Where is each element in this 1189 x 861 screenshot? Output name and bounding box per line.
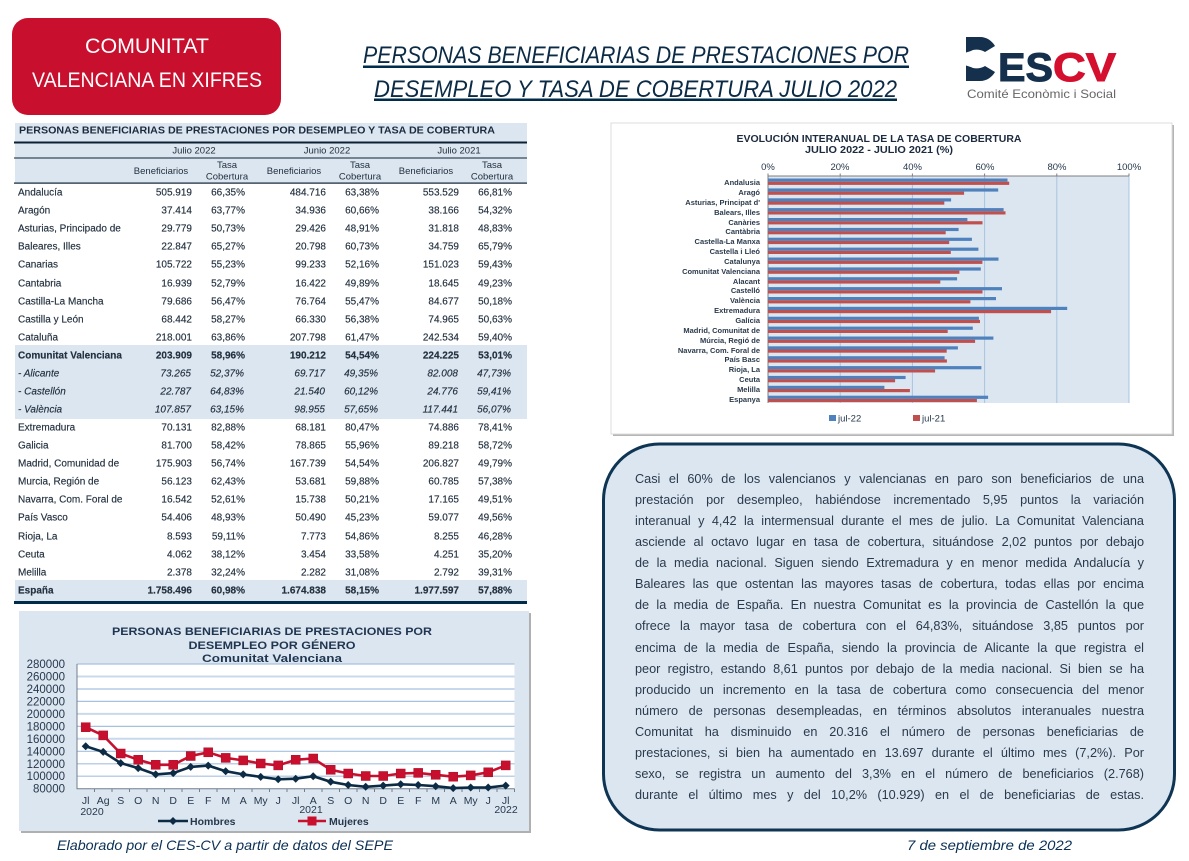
table rows: autonomous communities: 2.282 — [301, 568, 326, 578]
y axis labels: 100000 — [27, 771, 65, 783]
table rows: autonomous communities: 34.759 — [428, 242, 459, 252]
table rows: autonomous communities: 151.023 — [423, 260, 459, 270]
category labels: Espanya — [729, 395, 761, 404]
y axis labels: 120000 — [27, 759, 65, 771]
table rows: autonomous communities: 58,42% — [211, 440, 245, 452]
table rows: autonomous communities: 74.965 — [428, 314, 459, 326]
table rows: autonomous communities: 190.212 — [290, 350, 326, 362]
table rows: autonomous communities: 54,54% — [345, 458, 379, 470]
y axis labels: 80000 — [33, 784, 65, 796]
table rows: autonomous communities: 1.674.838 — [282, 586, 326, 596]
table rows: autonomous communities: 18.645 — [428, 278, 459, 290]
category labels: Comunitat Valenciana — [682, 267, 761, 276]
x axis labels: M — [431, 795, 440, 807]
table rows: autonomous communities: 105.722 — [156, 260, 192, 270]
table header: Cobertura — [471, 172, 514, 182]
source note: Elaborado por el CES-CV a partir de datos del SEPE — [57, 837, 394, 853]
x axis labels: J — [276, 795, 281, 807]
table rows: autonomous communities: 60.785 — [428, 476, 459, 488]
table rows: autonomous communities: Galicia — [18, 440, 49, 452]
table rows: autonomous communities: 60,12% — [344, 386, 378, 398]
x axis labels: S — [117, 795, 124, 807]
bars: jul-22 — [768, 178, 1067, 399]
x axis labels: M — [221, 795, 230, 807]
table rows: autonomous communities: 49,35% — [344, 368, 378, 380]
table rows: autonomous communities: 38.166 — [428, 206, 459, 216]
bar chart legend: jul-21 — [921, 414, 945, 424]
table rows: autonomous communities: 59,40% — [478, 332, 512, 344]
main title: DESEMPLEO Y TASA DE COBERTURA JULIO 2022 — [374, 76, 897, 103]
table rows: autonomous communities: Melilla — [18, 568, 47, 578]
table rows: autonomous communities: - Castellón — [18, 386, 66, 398]
table rows: autonomous communities: 54,54% — [345, 350, 379, 362]
table rows: autonomous communities: 60,73% — [345, 242, 379, 252]
table rows: autonomous communities: Ceuta — [18, 550, 45, 560]
table rows: autonomous communities: 21.540 — [293, 386, 325, 398]
table rows: autonomous communities: 66,35% — [211, 188, 245, 198]
bar chart: coverage rate — [611, 123, 1174, 436]
table rows: autonomous communities: 31,08% — [345, 568, 379, 578]
table rows: autonomous communities: 98.955 — [294, 404, 325, 416]
percentage axis: 100% — [1117, 162, 1142, 173]
table rows: autonomous communities: 16.422 — [295, 278, 326, 290]
table rows: autonomous communities: 2.792 — [434, 568, 459, 578]
table rows: autonomous communities: 50,18% — [478, 296, 512, 308]
table header — [134, 146, 514, 182]
table rows: autonomous communities: 56,38% — [345, 314, 379, 326]
table rows: autonomous communities: 54,32% — [478, 206, 512, 216]
table rows: autonomous communities: 54,86% — [345, 532, 379, 542]
table rows: autonomous communities: 52,37% — [210, 368, 244, 380]
category labels — [678, 178, 761, 404]
table rows: autonomous communities: 29.426 — [295, 224, 326, 234]
x axis labels: O — [134, 795, 142, 807]
table rows: autonomous communities: 55,96% — [345, 440, 379, 452]
table rows: autonomous communities: 63,86% — [211, 332, 245, 344]
table rows: autonomous communities: Madrid, Comunidad de — [18, 458, 120, 470]
x axis labels: My — [464, 795, 478, 807]
category labels: Melilla — [737, 385, 761, 394]
table rows: autonomous communities: 33,58% — [345, 550, 379, 560]
category labels: Canàries — [728, 218, 760, 227]
table rows: autonomous communities: - València — [18, 404, 63, 416]
y axis labels: 280000 — [27, 659, 65, 671]
table rows: autonomous communities: 38,12% — [211, 550, 245, 560]
table rows: autonomous communities: Navarra, Com. Foral de — [18, 494, 123, 506]
logo: CES CV — [966, 37, 1116, 101]
x axis labels: Jl — [82, 795, 89, 807]
line chart title: Comunitat Valenciana — [202, 653, 343, 665]
commentary text: peor registro, estando 8,61 puntos por debajo de la media nacional. Si bien se ha — [635, 662, 1144, 676]
category labels: Galícia — [735, 316, 761, 325]
category labels: Alacant — [733, 277, 761, 286]
table rows: autonomous communities: 2.378 — [167, 568, 192, 578]
table rows: autonomous communities: 81.700 — [161, 440, 192, 452]
table rows: autonomous communities: 57,38% — [478, 476, 512, 488]
table rows: autonomous communities: 63,77% — [211, 206, 245, 216]
category labels: València — [730, 296, 761, 305]
table rows: autonomous communities: 7.773 — [301, 532, 326, 542]
x axis labels: D — [169, 795, 177, 807]
bar chart legend: jul-22 — [837, 414, 861, 424]
line chart title: DESEMPLEO POR GÉNERO — [188, 639, 356, 652]
table rows: autonomous communities: Aragón — [18, 206, 50, 216]
table rows: autonomous communities: 48,93% — [211, 512, 245, 524]
logo: CES CV: ES — [998, 46, 1053, 90]
x axis labels: 2021 — [299, 804, 323, 816]
table rows: autonomous communities: 35,20% — [478, 550, 512, 560]
table rows: autonomous communities: 484.716 — [290, 188, 326, 198]
table rows: autonomous communities: 68.181 — [295, 422, 326, 434]
table rows: autonomous communities: 50,63% — [478, 314, 512, 326]
table rows: autonomous communities: 64,83% — [210, 386, 244, 398]
table rows: autonomous communities: 175.903 — [156, 458, 192, 470]
line chart legend — [158, 816, 369, 828]
x axis labels: S — [327, 795, 334, 807]
percentage axis: 20% — [830, 162, 850, 173]
commentary text: producido un incremento en la tasa de cobertura como consecuencia del menor — [635, 683, 1144, 697]
text panel background — [604, 444, 1174, 830]
x axis labels: A — [240, 795, 247, 807]
table rows: autonomous communities: 79.686 — [161, 296, 192, 308]
commentary text: de la media de España. En nuestra Comunitat es la provincia de Castellón la que — [635, 598, 1144, 612]
y axis labels: 220000 — [27, 696, 65, 708]
commentary text: Comunitat ha disminuido en 20.316 el número de personas beneficiarias de — [635, 725, 1144, 739]
table rows: autonomous communities: 29.779 — [161, 224, 192, 234]
line chart legend: Hombres — [190, 816, 236, 828]
commentary text: durante el último mes y del 10,2% (10.929) en el de beneficiarias de estas. — [635, 788, 1144, 802]
table rows: autonomous communities: 82,88% — [211, 422, 245, 434]
commentary text: encima de la media de España, siendo la provincia de Alicante la que registra el — [635, 641, 1144, 655]
table rows: autonomous communities: 58,96% — [211, 350, 245, 362]
line chart title — [112, 626, 432, 665]
table rows: autonomous communities: 553.529 — [423, 188, 459, 198]
table rows: autonomous communities: 58,27% — [211, 314, 245, 326]
table rows: autonomous communities: 117.441 — [423, 404, 458, 416]
table rows: autonomous communities: 57,65% — [344, 404, 378, 416]
table rows: autonomous communities: 1.977.597 — [414, 586, 459, 596]
commentary text: número de personas desempleadas, en términos absolutos interanuales nuestra — [635, 704, 1144, 718]
table rows: autonomous communities: 55,47% — [345, 296, 379, 308]
logo: CES CV: Comité Econòmic i Social — [967, 87, 1116, 101]
table rows: autonomous communities: 52,16% — [345, 260, 379, 270]
table rows: autonomous communities: 52,79% — [211, 278, 245, 290]
y axis labels — [27, 659, 65, 796]
table rows: autonomous communities — [18, 188, 512, 596]
category labels: Aragó — [738, 188, 760, 197]
commentary text — [635, 472, 1144, 802]
table rows: autonomous communities: Castilla-La Mancha — [18, 296, 104, 308]
table rows: autonomous communities: 207.798 — [290, 332, 326, 344]
table rows: autonomous communities: 56,47% — [211, 296, 245, 308]
table header: Beneficiarios — [134, 166, 188, 177]
table rows: autonomous communities: 49,23% — [478, 278, 512, 290]
series: Hombres — [82, 742, 510, 792]
table rows: autonomous communities: 99.233 — [295, 260, 326, 270]
category labels: Castelló — [731, 286, 760, 295]
y axis labels: 180000 — [27, 721, 65, 733]
commentary text: Baleares las que ostentan las mayores tasas de cobertura, todas ellas por encima — [635, 577, 1144, 591]
table header: Julio 2021 — [437, 146, 481, 156]
table rows: autonomous communities: Murcia, Región de — [18, 476, 100, 488]
table rows: autonomous communities: 65,79% — [478, 242, 512, 252]
table rows: autonomous communities: 59.077 — [428, 512, 459, 524]
category labels: Navarra, Com. Foral de — [678, 346, 760, 355]
table rows: autonomous communities: 1.758.496 — [148, 586, 192, 596]
table header: Julio 2022 — [172, 146, 216, 156]
table rows: autonomous communities: Canarias — [18, 260, 58, 270]
table rows: autonomous communities: 63,38% — [345, 188, 379, 198]
table rows: autonomous communities: 31.818 — [428, 224, 459, 234]
category labels: País Basc — [725, 355, 760, 364]
table rows: autonomous communities: 56.123 — [161, 476, 192, 488]
commentary text: sexo, se registra un aumento del 3,3% en el número de beneficiarios (2.768) — [635, 767, 1144, 781]
table rows: autonomous communities: 22.847 — [161, 242, 192, 252]
category labels: Catalunya — [724, 257, 761, 266]
table rows: autonomous communities: 49,51% — [478, 494, 512, 506]
table rows: autonomous communities: 49,79% — [478, 458, 512, 470]
table rows: autonomous communities: 52,61% — [211, 494, 245, 506]
table rows: autonomous communities: 66.330 — [295, 314, 326, 326]
table rows: autonomous communities: 218.001 — [156, 332, 192, 344]
commentary text: interanual y 4,42 la intermensual durante el mes de julio. La Comunitat Valenciana — [635, 514, 1144, 528]
x axis labels: Jl — [292, 795, 299, 807]
date: 7 de septiembre de 2022 — [907, 837, 1072, 853]
table rows: autonomous communities: 45,23% — [345, 512, 379, 524]
table rows: autonomous communities: 57,88% — [478, 586, 512, 596]
table rows: autonomous communities: Baleares, Illes — [18, 242, 81, 252]
table rows: autonomous communities: 48,91% — [345, 224, 379, 234]
table rows: autonomous communities: Castilla y León — [18, 314, 84, 326]
table rows: autonomous communities: Andalucía — [18, 188, 63, 198]
table rows: autonomous communities: Comunitat Valenciana — [18, 350, 122, 362]
table rows: autonomous communities: 74.886 — [428, 422, 459, 434]
table rows: autonomous communities: 59,88% — [345, 476, 379, 488]
table rows: autonomous communities: 3.454 — [301, 550, 326, 560]
table rows: autonomous communities: 80,47% — [345, 422, 379, 434]
table rows: autonomous communities: Asturias, Principado de — [18, 224, 121, 234]
x axis labels — [80, 795, 518, 818]
commentary text: asciende al octavo lugar en tasa de cobertura, situándose 2,02 puntos por debajo — [635, 535, 1144, 549]
table rows: autonomous communities: 60,66% — [345, 206, 379, 216]
bar chart legend — [829, 414, 945, 424]
table rows: autonomous communities: 8.255 — [434, 532, 459, 542]
percentage axis: 80% — [1047, 162, 1067, 173]
percentage axis: 0% — [761, 162, 775, 173]
table rows: autonomous communities: 47,73% — [477, 368, 511, 380]
table rows: autonomous communities: 78,41% — [478, 422, 512, 434]
category labels: Cantàbria — [725, 227, 761, 236]
logo: CES CV: CV — [1053, 46, 1116, 90]
x axis labels: A — [450, 795, 457, 807]
percentage axis: 40% — [903, 162, 923, 173]
bars: jul-21 — [768, 182, 1051, 402]
table rows: autonomous communities: 84.677 — [428, 296, 459, 308]
table rows: autonomous communities: 167.739 — [290, 458, 326, 470]
table rows: autonomous communities: 505.919 — [156, 188, 192, 198]
table rows: autonomous communities: 58,15% — [345, 586, 379, 596]
table rows: autonomous communities: 49,56% — [478, 512, 512, 524]
table rows: autonomous communities: 22.787 — [159, 386, 191, 398]
table rows: autonomous communities: 61,47% — [345, 332, 379, 344]
table rows: autonomous communities: 55,23% — [211, 260, 245, 270]
x axis labels: My — [254, 795, 268, 807]
table rows: autonomous communities: 15.738 — [295, 494, 326, 506]
data table — [14, 123, 527, 604]
table rows: autonomous communities: 59,11% — [212, 532, 245, 542]
x axis labels: F — [415, 795, 421, 807]
table header: Tasa — [350, 160, 371, 171]
x axis labels: A — [310, 795, 317, 807]
table rows: autonomous communities: 16.939 — [161, 278, 192, 290]
category labels: Andalusia — [724, 178, 761, 187]
x axis labels: E — [187, 795, 194, 807]
table rows: autonomous communities: 8.593 — [167, 532, 192, 542]
table rows: autonomous communities: 65,27% — [211, 242, 245, 252]
x axis labels: N — [362, 795, 369, 807]
table rows: autonomous communities: 53,01% — [478, 350, 512, 362]
table rows: autonomous communities: 50.490 — [295, 512, 326, 524]
line chart: beneficiaries by gender — [19, 611, 531, 833]
badge: Comunitat Valenciana en xifres: VALENCIANA EN XIFRES — [32, 69, 262, 92]
table header: Junio 2022 — [304, 146, 350, 156]
table rows: autonomous communities: 49,89% — [345, 278, 379, 290]
table rows: autonomous communities: 39,31% — [478, 568, 512, 578]
x axis labels: 2022 — [494, 804, 518, 816]
badge: Comunitat Valenciana en xifres — [12, 18, 281, 115]
table rows: autonomous communities: 4.062 — [167, 550, 192, 560]
table rows: autonomous communities: Cataluña — [18, 332, 58, 344]
table rows: autonomous communities: Rioja, La — [18, 532, 58, 542]
percentage axis — [761, 162, 1142, 173]
table rows: autonomous communities: 70.131 — [161, 422, 192, 434]
bar chart title: JULIO 2022 - JULIO 2021 (%) — [805, 144, 953, 156]
table rows: autonomous communities: 4.251 — [434, 550, 459, 560]
table rows: autonomous communities: 54.406 — [161, 512, 192, 524]
table rows: autonomous communities: 56,07% — [477, 404, 511, 416]
commentary text: Casi el 60% de los valencianos y valencianas en paro son beneficiarios de una — [635, 472, 1144, 486]
category labels: Múrcia, Regió de — [700, 336, 760, 345]
table header: Cobertura — [206, 172, 249, 182]
y axis labels: 260000 — [27, 672, 65, 684]
category labels: Madrid, Comunitat de — [683, 326, 760, 335]
bar chart title — [736, 132, 1022, 156]
y axis labels: 160000 — [27, 734, 65, 746]
table rows: autonomous communities: 73.265 — [160, 368, 191, 380]
table rows: autonomous communities: 50,21% — [345, 494, 379, 506]
table rows: autonomous communities: 37.414 — [161, 206, 192, 216]
x axis labels: E — [397, 795, 404, 807]
table rows: autonomous communities: 59,41% — [477, 386, 511, 398]
table rows: autonomous communities: 17.165 — [428, 494, 459, 506]
table rows: autonomous communities: 78.865 — [295, 440, 326, 452]
x axis labels: J — [486, 795, 491, 807]
table rows: autonomous communities: 89.218 — [428, 440, 459, 452]
table header: Cobertura — [339, 172, 382, 182]
table rows: autonomous communities: 24.776 — [426, 386, 458, 398]
percentage axis: 60% — [975, 162, 995, 173]
table rows: autonomous communities: 224.225 — [423, 350, 459, 362]
main title: PERSONAS BENEFICIARIAS DE PRESTACIONES POR — [363, 42, 909, 69]
table rows: autonomous communities: 59,43% — [478, 260, 512, 270]
x axis labels: D — [379, 795, 387, 807]
category labels: Balears, Illes — [714, 208, 760, 217]
x axis labels: O — [344, 795, 352, 807]
category labels: Castella-La Manxa — [695, 237, 761, 246]
category labels: Asturias, Principat d' — [685, 198, 760, 207]
table title: PERSONAS BENEFICIARIAS DE PRESTACIONES POR DESEMPLEO Y TASA DE COBERTURA — [19, 124, 495, 136]
line chart legend: Mujeres — [329, 816, 369, 828]
category labels: Rioja, La — [729, 365, 761, 374]
table rows: autonomous communities: 48,83% — [478, 224, 512, 234]
table header: Beneficiarios — [267, 166, 321, 177]
table rows: autonomous communities: 56,74% — [211, 458, 245, 470]
table rows: autonomous communities: 203.909 — [156, 350, 192, 362]
table rows: autonomous communities: Extremadura — [18, 422, 76, 434]
table rows: autonomous communities: 60,98% — [211, 586, 245, 596]
x axis labels: Ag — [97, 795, 110, 807]
series: Mujeres — [81, 723, 510, 781]
table rows: autonomous communities: País Vasco — [18, 512, 68, 524]
table header: Beneficiarios — [399, 166, 453, 177]
x axis labels: F — [205, 795, 211, 807]
table rows: autonomous communities: 32,24% — [211, 568, 245, 578]
table header: Tasa — [482, 160, 503, 171]
category labels: Castella i Lleó — [710, 247, 760, 256]
table rows: autonomous communities: 107.857 — [155, 404, 191, 416]
commentary text: de la media nacional. Siguen siendo Extremadura y en menor medida Andalucía y — [635, 556, 1144, 570]
table rows: autonomous communities: 69.717 — [294, 368, 325, 380]
table rows: autonomous communities: 20.798 — [295, 242, 326, 252]
commentary text: ofrece la mayor tasa de cobertura con el 64,83%, situándose 3,85 puntos por — [635, 619, 1144, 633]
table rows: autonomous communities: 62,43% — [211, 476, 245, 488]
y axis labels: 200000 — [27, 709, 65, 721]
table rows: autonomous communities: 58,72% — [478, 440, 512, 452]
table rows: autonomous communities: 68.442 — [161, 314, 192, 326]
commentary text: prestaciones, si bien ha aumentado en 13.697 durante el último mes (7,2%). Por — [635, 746, 1144, 760]
x axis labels: N — [152, 795, 159, 807]
line chart title: PERSONAS BENEFICIARIAS DE PRESTACIONES POR — [112, 626, 432, 638]
table rows: autonomous communities: 50,73% — [211, 224, 245, 234]
y axis labels: 140000 — [27, 746, 65, 758]
x axis labels: 2020 — [80, 806, 104, 818]
table rows: autonomous communities: 34.936 — [295, 206, 326, 216]
table rows: autonomous communities: Cantabria — [18, 278, 62, 290]
bar chart title: EVOLUCIÓN INTERANUAL DE LA TASA DE COBERTURA — [736, 132, 1022, 145]
table rows: autonomous communities: 242.534 — [423, 332, 459, 344]
table rows: autonomous communities: 63,15% — [210, 404, 244, 416]
table rows: autonomous communities: 16.542 — [161, 494, 192, 506]
table rows: autonomous communities: - Alicante — [18, 368, 60, 380]
table rows: autonomous communities: 206.827 — [423, 458, 459, 470]
badge: Comunitat Valenciana en xifres: COMUNITAT — [85, 35, 209, 58]
table rows: autonomous communities: 82.008 — [427, 368, 458, 380]
table rows: autonomous communities: 46,28% — [478, 532, 512, 542]
category labels: Extremadura — [714, 306, 761, 315]
table rows: autonomous communities: 53.681 — [295, 476, 326, 488]
commentary text: prestación por desempleo, habiéndose incrementado 5,95 puntos la variación — [635, 493, 1144, 507]
category labels: Ceuta — [739, 375, 761, 384]
x axis labels: Jl — [502, 795, 509, 807]
table header: Tasa — [217, 160, 238, 171]
table rows: autonomous communities: 76.764 — [295, 296, 326, 308]
main title — [363, 42, 909, 103]
table rows: autonomous communities: España — [18, 586, 54, 596]
y axis labels: 240000 — [27, 684, 65, 696]
table rows: autonomous communities: 66,81% — [478, 188, 512, 198]
